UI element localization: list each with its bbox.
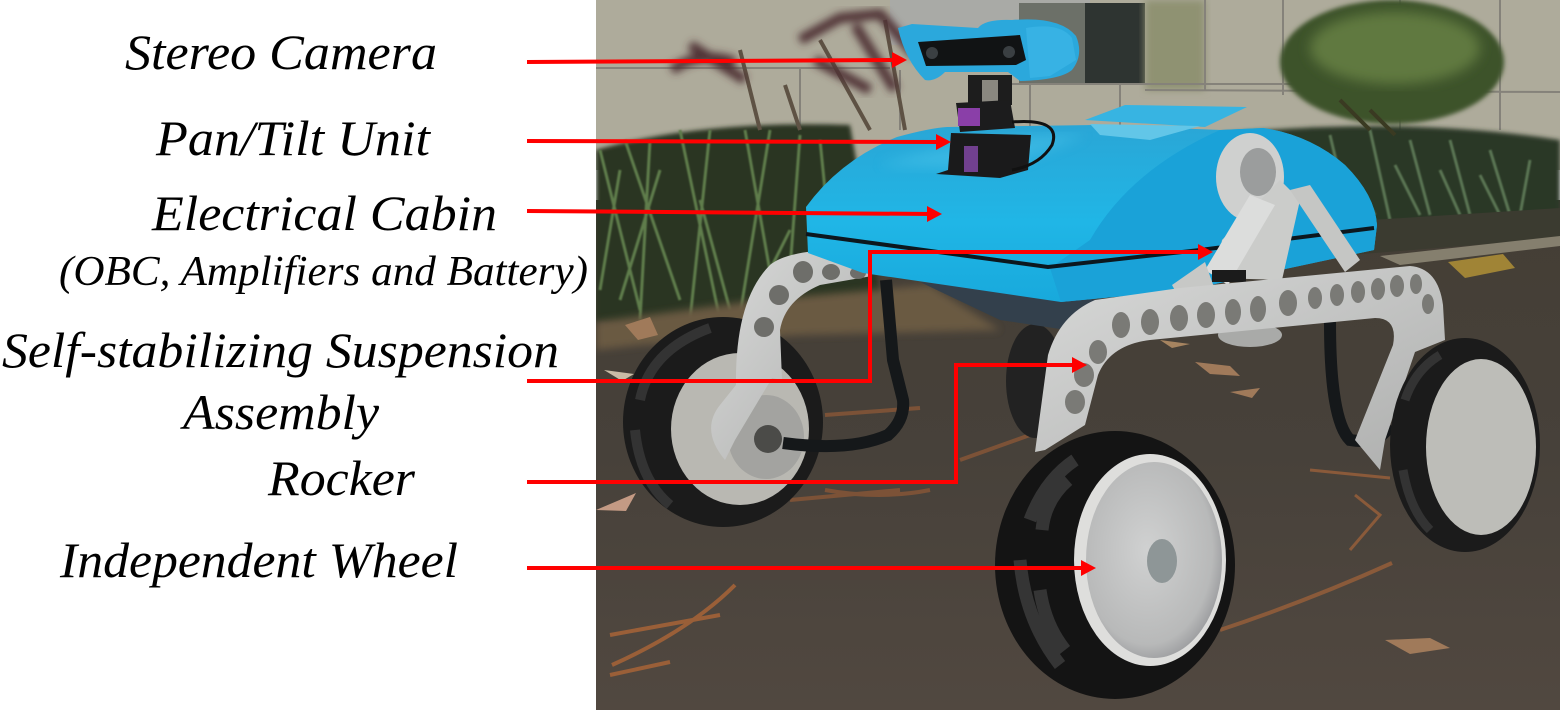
photo background: wall [596,0,1560,170]
label: Self-stabilizing Suspension: Self-stabilizing Suspension [2,322,559,378]
arrow: Stereo Camera [527,52,907,68]
label: Stereo Camera: Stereo Camera [125,24,437,80]
front independent wheel [995,431,1235,699]
photo background: hedge [596,124,1560,325]
rover underbody [920,282,1100,332]
label: Pan/Tilt Unit: Pan/Tilt Unit [155,110,431,166]
electrical cabin shell [806,105,1377,302]
arrow: Electrical Cabin [527,206,942,222]
back left wheel [623,317,823,527]
label: Independent Wheel: Independent Wheel [59,532,458,588]
stereo camera [898,19,1079,81]
suspension assembly [1172,133,1360,347]
right rear wheel [1390,338,1540,552]
photo background: leaf litter band [596,285,1000,350]
label: Assembly: Assembly [180,384,380,440]
arrow: Independent Wheel [527,560,1096,576]
label: cabin contents: (OBC, Amplifiers and Battery) [59,249,588,295]
panel: rover photo [596,0,1560,710]
rocker [1035,266,1445,470]
label: Electrical Cabin: Electrical Cabin [151,185,497,241]
left rear rocker [711,250,872,460]
photo background: curb [1340,208,1560,255]
cable hoses [783,280,1390,446]
arrow: Rocker [527,357,1087,482]
photo background: road [596,200,1560,710]
arrow: Suspension Assembly [527,244,1213,381]
photo background: fallen leaves and twigs [596,254,1515,675]
back inner wheel [1006,324,1054,438]
arrow: Pan/Tilt Unit [527,134,951,150]
label: Rocker: Rocker [267,450,416,506]
pan/tilt unit [936,75,1054,178]
photo background: shrubs [672,0,1504,135]
